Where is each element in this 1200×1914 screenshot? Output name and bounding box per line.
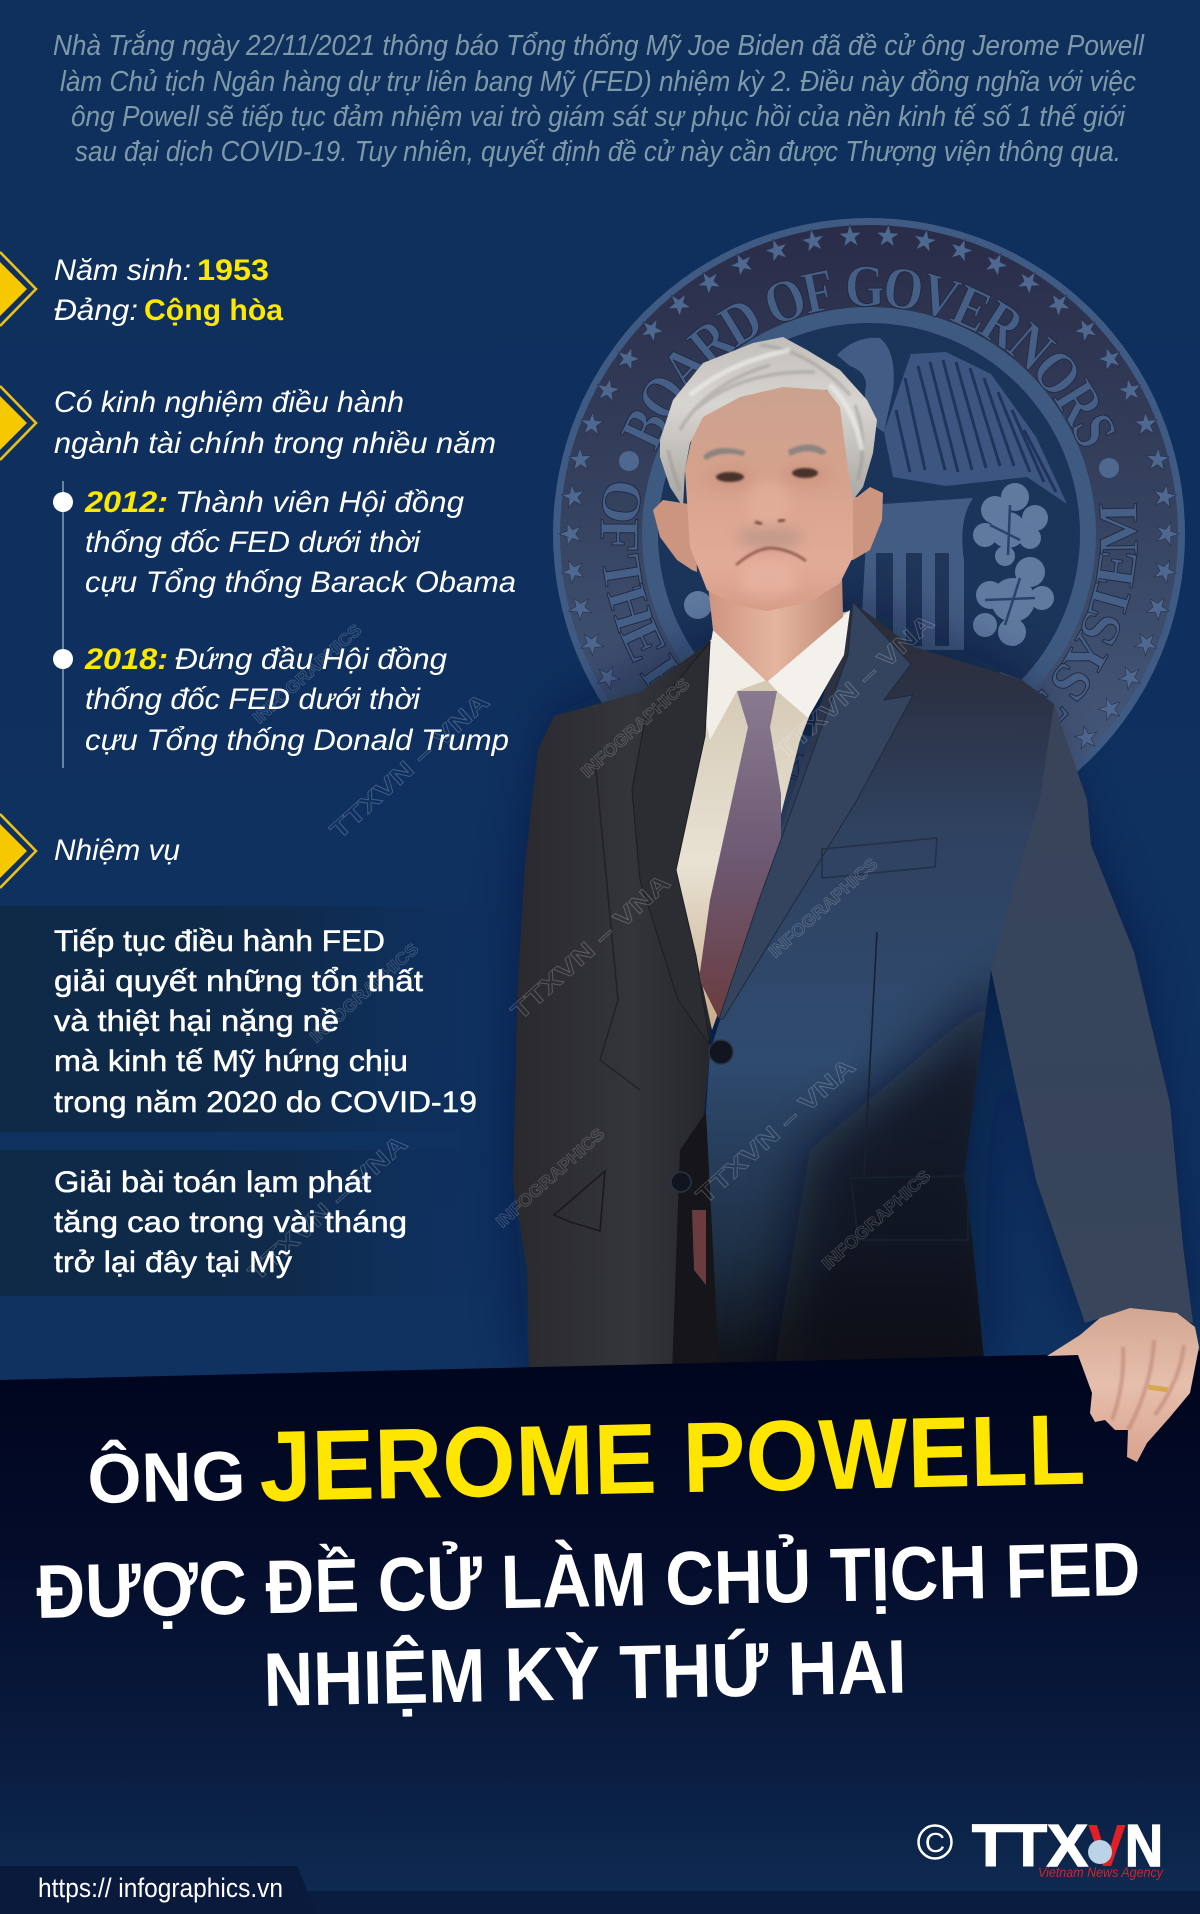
wedding ring [1148, 1387, 1168, 1390]
seal oak leaves [684, 483, 1054, 646]
neck [708, 575, 843, 682]
upper lip shadow [736, 527, 804, 549]
panel: mission 1: và thiệt hại nặng nề [54, 1005, 339, 1038]
icon: chevron marker [0, 386, 36, 460]
watermarks: INFOGRAPHICS [765, 854, 881, 961]
seal lettering: O [879, 253, 928, 325]
watermarks: TTXVN – VNA [243, 1130, 413, 1287]
mouth [736, 548, 806, 565]
watermarks: INFOGRAPHICS [249, 620, 365, 727]
ear left [653, 500, 697, 572]
seal lettering: D [708, 284, 774, 361]
third bullet: mission heading: Nhiệm vụ [54, 834, 180, 867]
first bullet: birth year and party: Cộng hòa [144, 294, 283, 327]
seal lettering: V [912, 260, 967, 334]
copyright and TTXVN logo: N [1125, 1813, 1163, 1879]
right lapel [719, 602, 913, 1019]
shadow behind figure [513, 602, 1188, 1370]
seal lettering: R [1041, 370, 1117, 437]
pockets and seams [554, 760, 968, 1240]
title [36, 1394, 1141, 1723]
timeline entry 2012: thống đốc FED dưới thời [85, 526, 421, 559]
title panel [0, 1351, 1200, 1914]
timeline entry 2018 [53, 643, 509, 757]
intro paragraph [53, 29, 1145, 168]
eyes [716, 468, 818, 482]
jacket: sleeve [985, 672, 1193, 1323]
first bullet: birth year and party: Năm sinh: [54, 254, 191, 287]
panel: mission 1: giải quyết những tổn thất [54, 965, 424, 998]
panel: mission 1: Tiếp tục điều hành FED [54, 925, 385, 958]
timeline entry 2012: cựu Tổng thống Barack Obama [85, 566, 516, 599]
seal lettering: OF THE FEDERAL RESERVE SYSTEM [600, 482, 1138, 780]
title: NHIỆM KỲ THỨ HAI [263, 1624, 907, 1723]
seal lettering: B [608, 399, 683, 458]
hand [1047, 1308, 1199, 1462]
panel: mission 1 [0, 906, 510, 1132]
second bullet: experience: Có kinh nghiệm điều hành [54, 386, 404, 419]
eyebrows [703, 444, 827, 460]
watermarks: INFOGRAPHICS [306, 939, 422, 1046]
icon: chevron marker [0, 252, 36, 326]
seal lettering: R [676, 305, 748, 381]
footer tab with website url: https:// infographics.vn [38, 1873, 283, 1903]
timeline entry 2012: Thành viên Hội đồng [175, 486, 464, 519]
copyright and TTXVN logo [918, 1813, 1164, 1880]
title: ÔNG [87, 1436, 246, 1518]
timeline [53, 481, 516, 768]
seal lettering: E [942, 271, 1001, 346]
seal lettering: S [1057, 404, 1130, 457]
second bullet: experience [0, 386, 496, 460]
seal lettering: A [649, 332, 723, 404]
nostrils [755, 520, 785, 524]
jacket: front right [706, 602, 1054, 1366]
portrait: Jerome Powell [513, 337, 1193, 1390]
seal lettering: O [1019, 336, 1095, 410]
panel: mission 2 [0, 1150, 510, 1296]
watermarks: INFOGRAPHICS [577, 674, 693, 781]
seal eagle [837, 338, 1067, 504]
jacket buttons [671, 1040, 733, 1192]
watermarks [243, 609, 940, 1287]
footer strip [0, 1891, 1200, 1914]
shirt [676, 611, 850, 1030]
necktie [692, 691, 781, 1285]
first bullet: birth year and party: 1953 [197, 254, 269, 287]
shirt collar [701, 610, 850, 740]
seal lettering: R [968, 287, 1036, 364]
first bullet: birth year and party: Đảng: [54, 294, 138, 327]
timeline entry 2018: thống đốc FED dưới thời [85, 683, 421, 716]
watermarks: TTXVN – VNA [325, 688, 495, 845]
seal lettering: O [624, 362, 702, 432]
hair [660, 337, 877, 507]
timeline entry 2018: cựu Tổng thống Donald Trump [85, 724, 509, 757]
icon: chevron marker [0, 814, 36, 888]
timeline entry 2012: 2012: [84, 486, 168, 519]
seal stars [559, 224, 1179, 780]
timeline entry 2018: Đứng đầu Hội đồng [175, 643, 447, 676]
seal lettering: N [995, 309, 1066, 384]
left lapel [632, 642, 710, 1045]
jacket: left side [513, 642, 710, 1372]
second bullet: experience: ngành tài chính trong nhiều năm [54, 427, 496, 460]
watermarks: INFOGRAPHICS [818, 1166, 934, 1273]
eye socket shading [704, 461, 832, 491]
watermarks: TTXVN – VNA [506, 869, 676, 1026]
jacket shading [764, 972, 990, 1356]
seal lettering [600, 253, 1138, 780]
trousers [672, 1112, 722, 1372]
timeline entry 2012 [53, 486, 516, 599]
face [685, 375, 853, 611]
copyright and TTXVN logo: TTX [972, 1813, 1088, 1879]
chin highlight [738, 562, 798, 598]
copyright and TTXVN logo: C [925, 1827, 945, 1858]
seal lettering: O [755, 263, 815, 339]
ear right [845, 487, 883, 560]
watermarks: TTXVN – VNA [691, 1053, 861, 1210]
first bullet: birth year and party [0, 252, 283, 327]
panel: mission 1: mà kinh tế Mỹ hứng chịu [54, 1045, 408, 1078]
copyright and TTXVN logo: Vietnam News Agency [1038, 1864, 1164, 1880]
panel: mission 1: trong năm 2020 do COVID-19 [54, 1086, 477, 1119]
panel: mission 2: Giải bài toán lạm phát [54, 1166, 372, 1199]
third bullet: mission heading [0, 814, 180, 888]
panel: mission 2: trở lại đây tại Mỹ [54, 1246, 292, 1279]
nose [746, 481, 790, 529]
Federal Reserve seal [553, 218, 1185, 830]
seal shield [860, 498, 973, 650]
watermarks: INFOGRAPHICS [492, 1124, 608, 1231]
watermarks: TTXVN – VNA [770, 609, 940, 766]
facial features [703, 444, 832, 598]
panel: mission 2: tăng cao trong vài tháng [54, 1206, 407, 1239]
seal lettering: F [796, 256, 840, 328]
copyright and TTXVN logo: V [1088, 1813, 1126, 1879]
footer tab with website url [0, 1866, 317, 1914]
timeline entry 2018: 2018: [84, 643, 168, 676]
title: JEROME POWELL [258, 1394, 1086, 1523]
seal lettering: G [844, 253, 885, 320]
